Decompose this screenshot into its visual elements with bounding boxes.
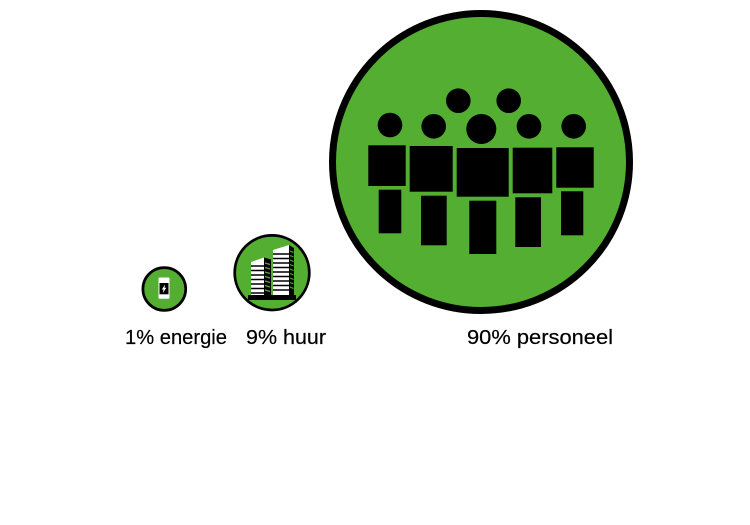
- icon: battery: [158, 278, 170, 299]
- label: 1% energie: 1% energie: [125, 327, 227, 349]
- label: 9% huur: 9% huur: [246, 327, 326, 349]
- bubble: 1% energy: [143, 268, 186, 310]
- bubble: 90% personnel: [332, 14, 630, 310]
- bubble: 9% rent: [235, 235, 309, 310]
- label: 90% personeel: 90% personeel: [467, 327, 613, 349]
- icon: group of people: [368, 88, 594, 254]
- icon: office buildings: [248, 245, 296, 300]
